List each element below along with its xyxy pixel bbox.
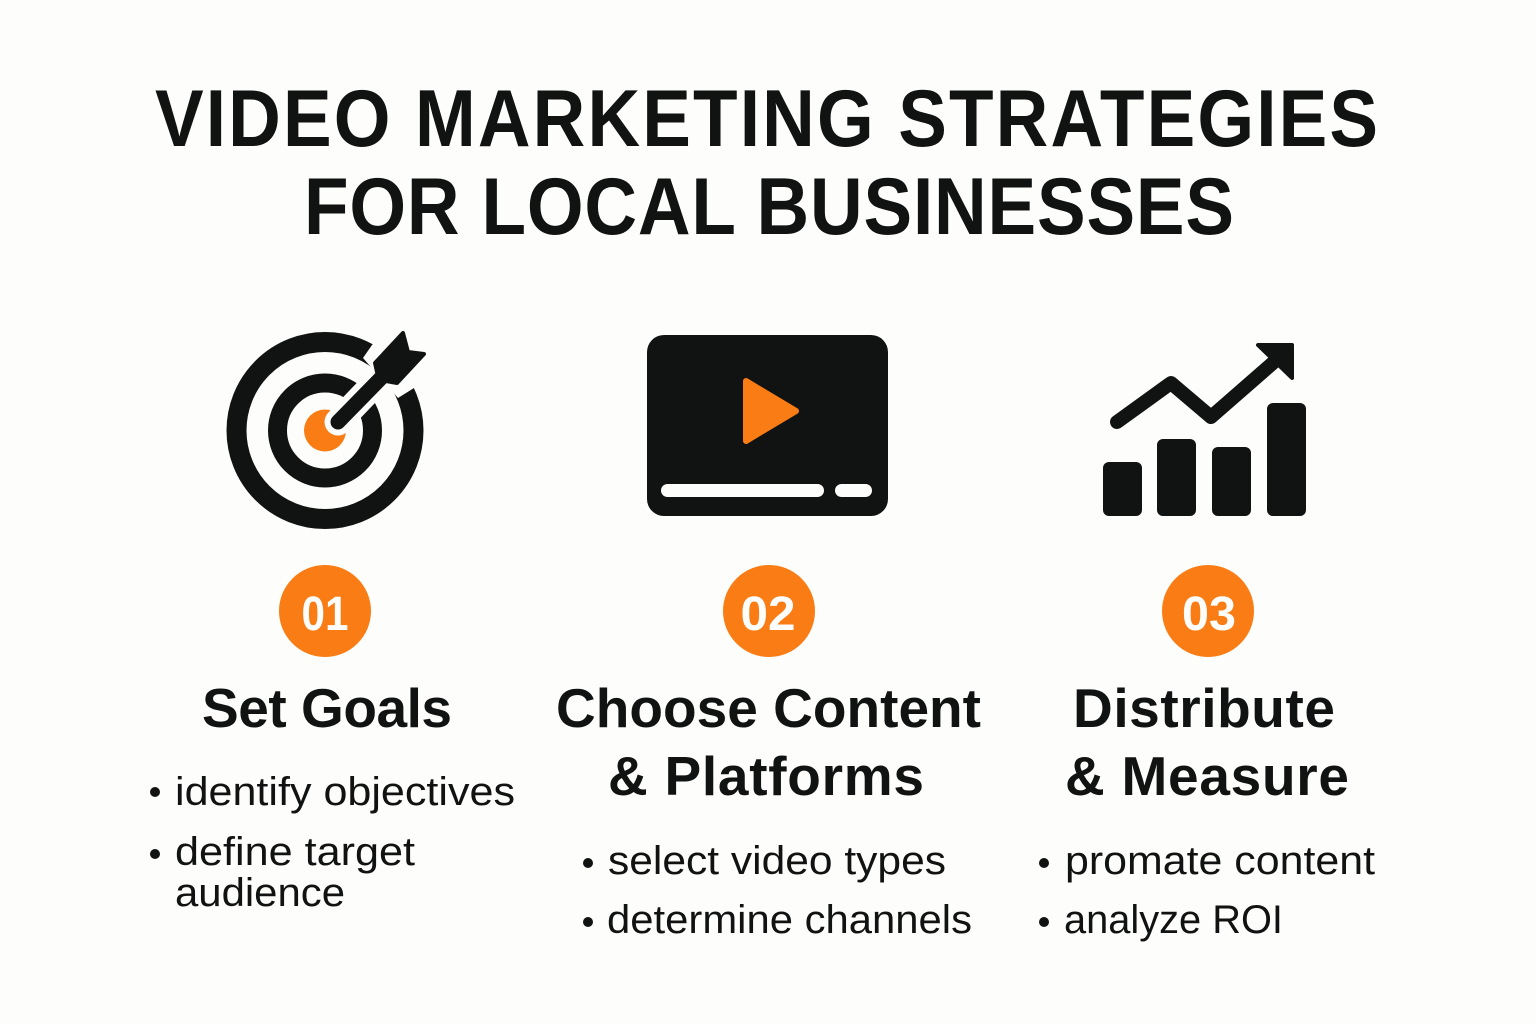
badge 03 [1162,565,1254,657]
bullet list: Set Goals: define target [175,830,415,874]
bullet list: Set Goals: audience [175,871,345,915]
title [155,73,1378,252]
badge 02 [723,565,815,657]
bullet list: Choose Content: determine channels [607,898,972,942]
bullet list: Set Goals [150,770,515,915]
bullet list: Distribute & Measure [1039,839,1375,942]
bullet list: Choose Content: select video types [608,839,946,883]
heading: Distribute & Measure: Distribute [1073,677,1335,739]
badge 02: 02 [740,588,796,641]
bullet list: Distribute & Measure: analyze ROI [1064,898,1283,942]
heading: Distribute & Measure: & Measure [1065,745,1349,807]
icon: video player [647,335,888,516]
heading: Choose Content & Platforms [556,677,981,807]
heading: Choose Content & Platforms: Choose Content [556,677,981,739]
title: VIDEO MARKETING STRATEGIES [155,73,1378,164]
badge 01 [279,565,371,657]
icon: target with arrow [236,320,440,519]
badge 03: 03 [1182,588,1236,641]
bullet list: Distribute & Measure: promate content [1065,839,1375,883]
bullet list: Choose Content [583,839,972,942]
title: FOR LOCAL BUSINESSES [304,161,1234,252]
heading: Distribute & Measure [1065,677,1349,807]
bullet list: Set Goals: identify objectives [175,770,515,814]
heading: Set Goals: Set Goals [202,677,452,739]
badge 01: 01 [302,588,348,641]
heading: Choose Content & Platforms: & Platforms [608,745,924,807]
icon: growth chart [1103,345,1306,516]
